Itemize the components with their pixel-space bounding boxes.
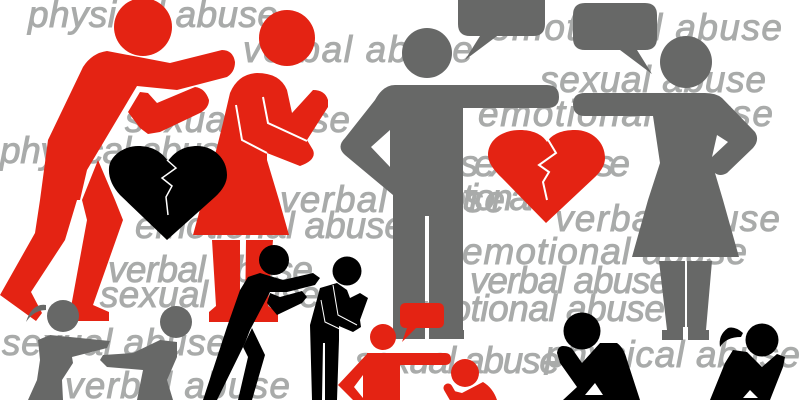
figure: small black woman [310, 256, 368, 400]
background handwriting: abuse words: sexual abuse [355, 340, 560, 381]
background handwriting: abuse words: sexual abuse [125, 99, 350, 140]
background handwriting: abuse words: sexual abuse [540, 59, 766, 100]
background handwriting: abuse words: physical abuse [544, 334, 800, 375]
background handwriting: abuse words: verbal abuse [243, 29, 473, 70]
background handwriting: abuse words: emotional abuse [400, 288, 665, 329]
background handwriting: abuse words: verbal abuse [108, 249, 313, 290]
background handwriting: abuse words: sexual abuse [2, 322, 227, 363]
background handwriting: abuse words: verbal abuse [280, 179, 505, 220]
background handwriting: abuse words: physical abuse [0, 130, 240, 171]
figure: black seated girl [710, 324, 785, 400]
background handwriting: abuse words: emotional [400, 177, 537, 218]
figure: small red man with speech bubble [338, 303, 451, 400]
figure: black seated person [557, 312, 640, 400]
figure: small black man pushing [203, 245, 320, 400]
background handwriting: abuse words: emotional abuse [478, 93, 773, 134]
background handwriting: abuse words: emotional abuse [135, 205, 405, 246]
background handwriting: abuse words: sexual abuse [460, 143, 630, 184]
figure: large gray woman with speech bubble [573, 3, 757, 340]
figure: small red woman [448, 359, 497, 400]
icon: black broken heart [109, 146, 227, 240]
icon: red broken heart [488, 130, 605, 223]
figure: large red man pushing [0, 0, 235, 321]
figure: large red woman [193, 10, 328, 322]
background handwriting: abuse words: emotional abuse [462, 231, 747, 272]
figure: large gray man with speech bubble [340, 0, 559, 339]
background handwriting: abuse words: verbal abuse [470, 260, 670, 301]
background handwriting: abuse words: verbal abuse [555, 198, 780, 239]
background handwriting: abuse words: sexual abuse [100, 274, 320, 315]
background handwriting: abuse words: emotional abuse [490, 7, 782, 48]
figure: small gray pair [26, 300, 192, 400]
